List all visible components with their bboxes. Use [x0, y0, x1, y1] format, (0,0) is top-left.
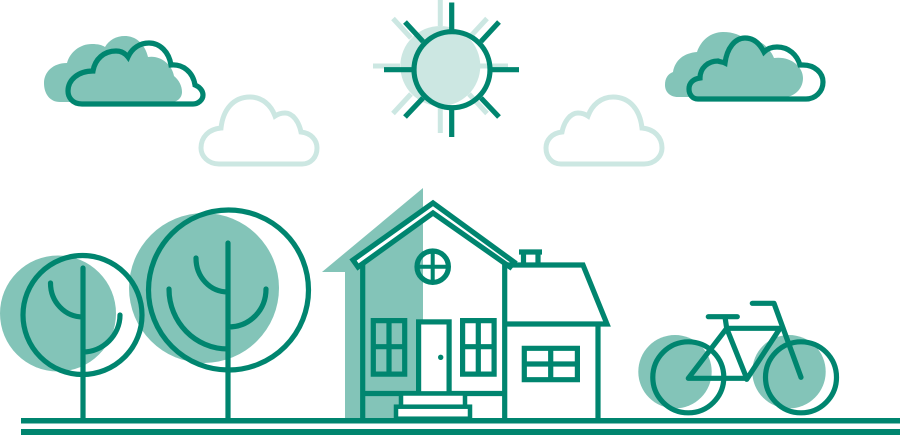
house — [322, 188, 607, 419]
icon: pale cloud right — [546, 97, 662, 164]
chimney — [519, 252, 542, 265]
left window — [373, 320, 405, 375]
icon: small tree — [0, 256, 142, 418]
walls — [363, 262, 607, 418]
right window — [462, 320, 495, 375]
garage window — [524, 348, 578, 380]
icon: large tree — [129, 210, 308, 418]
icon: sun — [373, 0, 519, 137]
icon: bicycle — [638, 303, 836, 413]
ground lines — [21, 418, 900, 435]
icon: cloud top right — [665, 32, 823, 99]
roof — [353, 203, 514, 267]
icon: cloud top left — [44, 36, 203, 104]
porch steps — [396, 394, 470, 419]
door — [419, 322, 449, 394]
round attic window — [417, 251, 448, 282]
house shadow fill — [322, 188, 423, 418]
icon: pale cloud left — [201, 97, 317, 164]
